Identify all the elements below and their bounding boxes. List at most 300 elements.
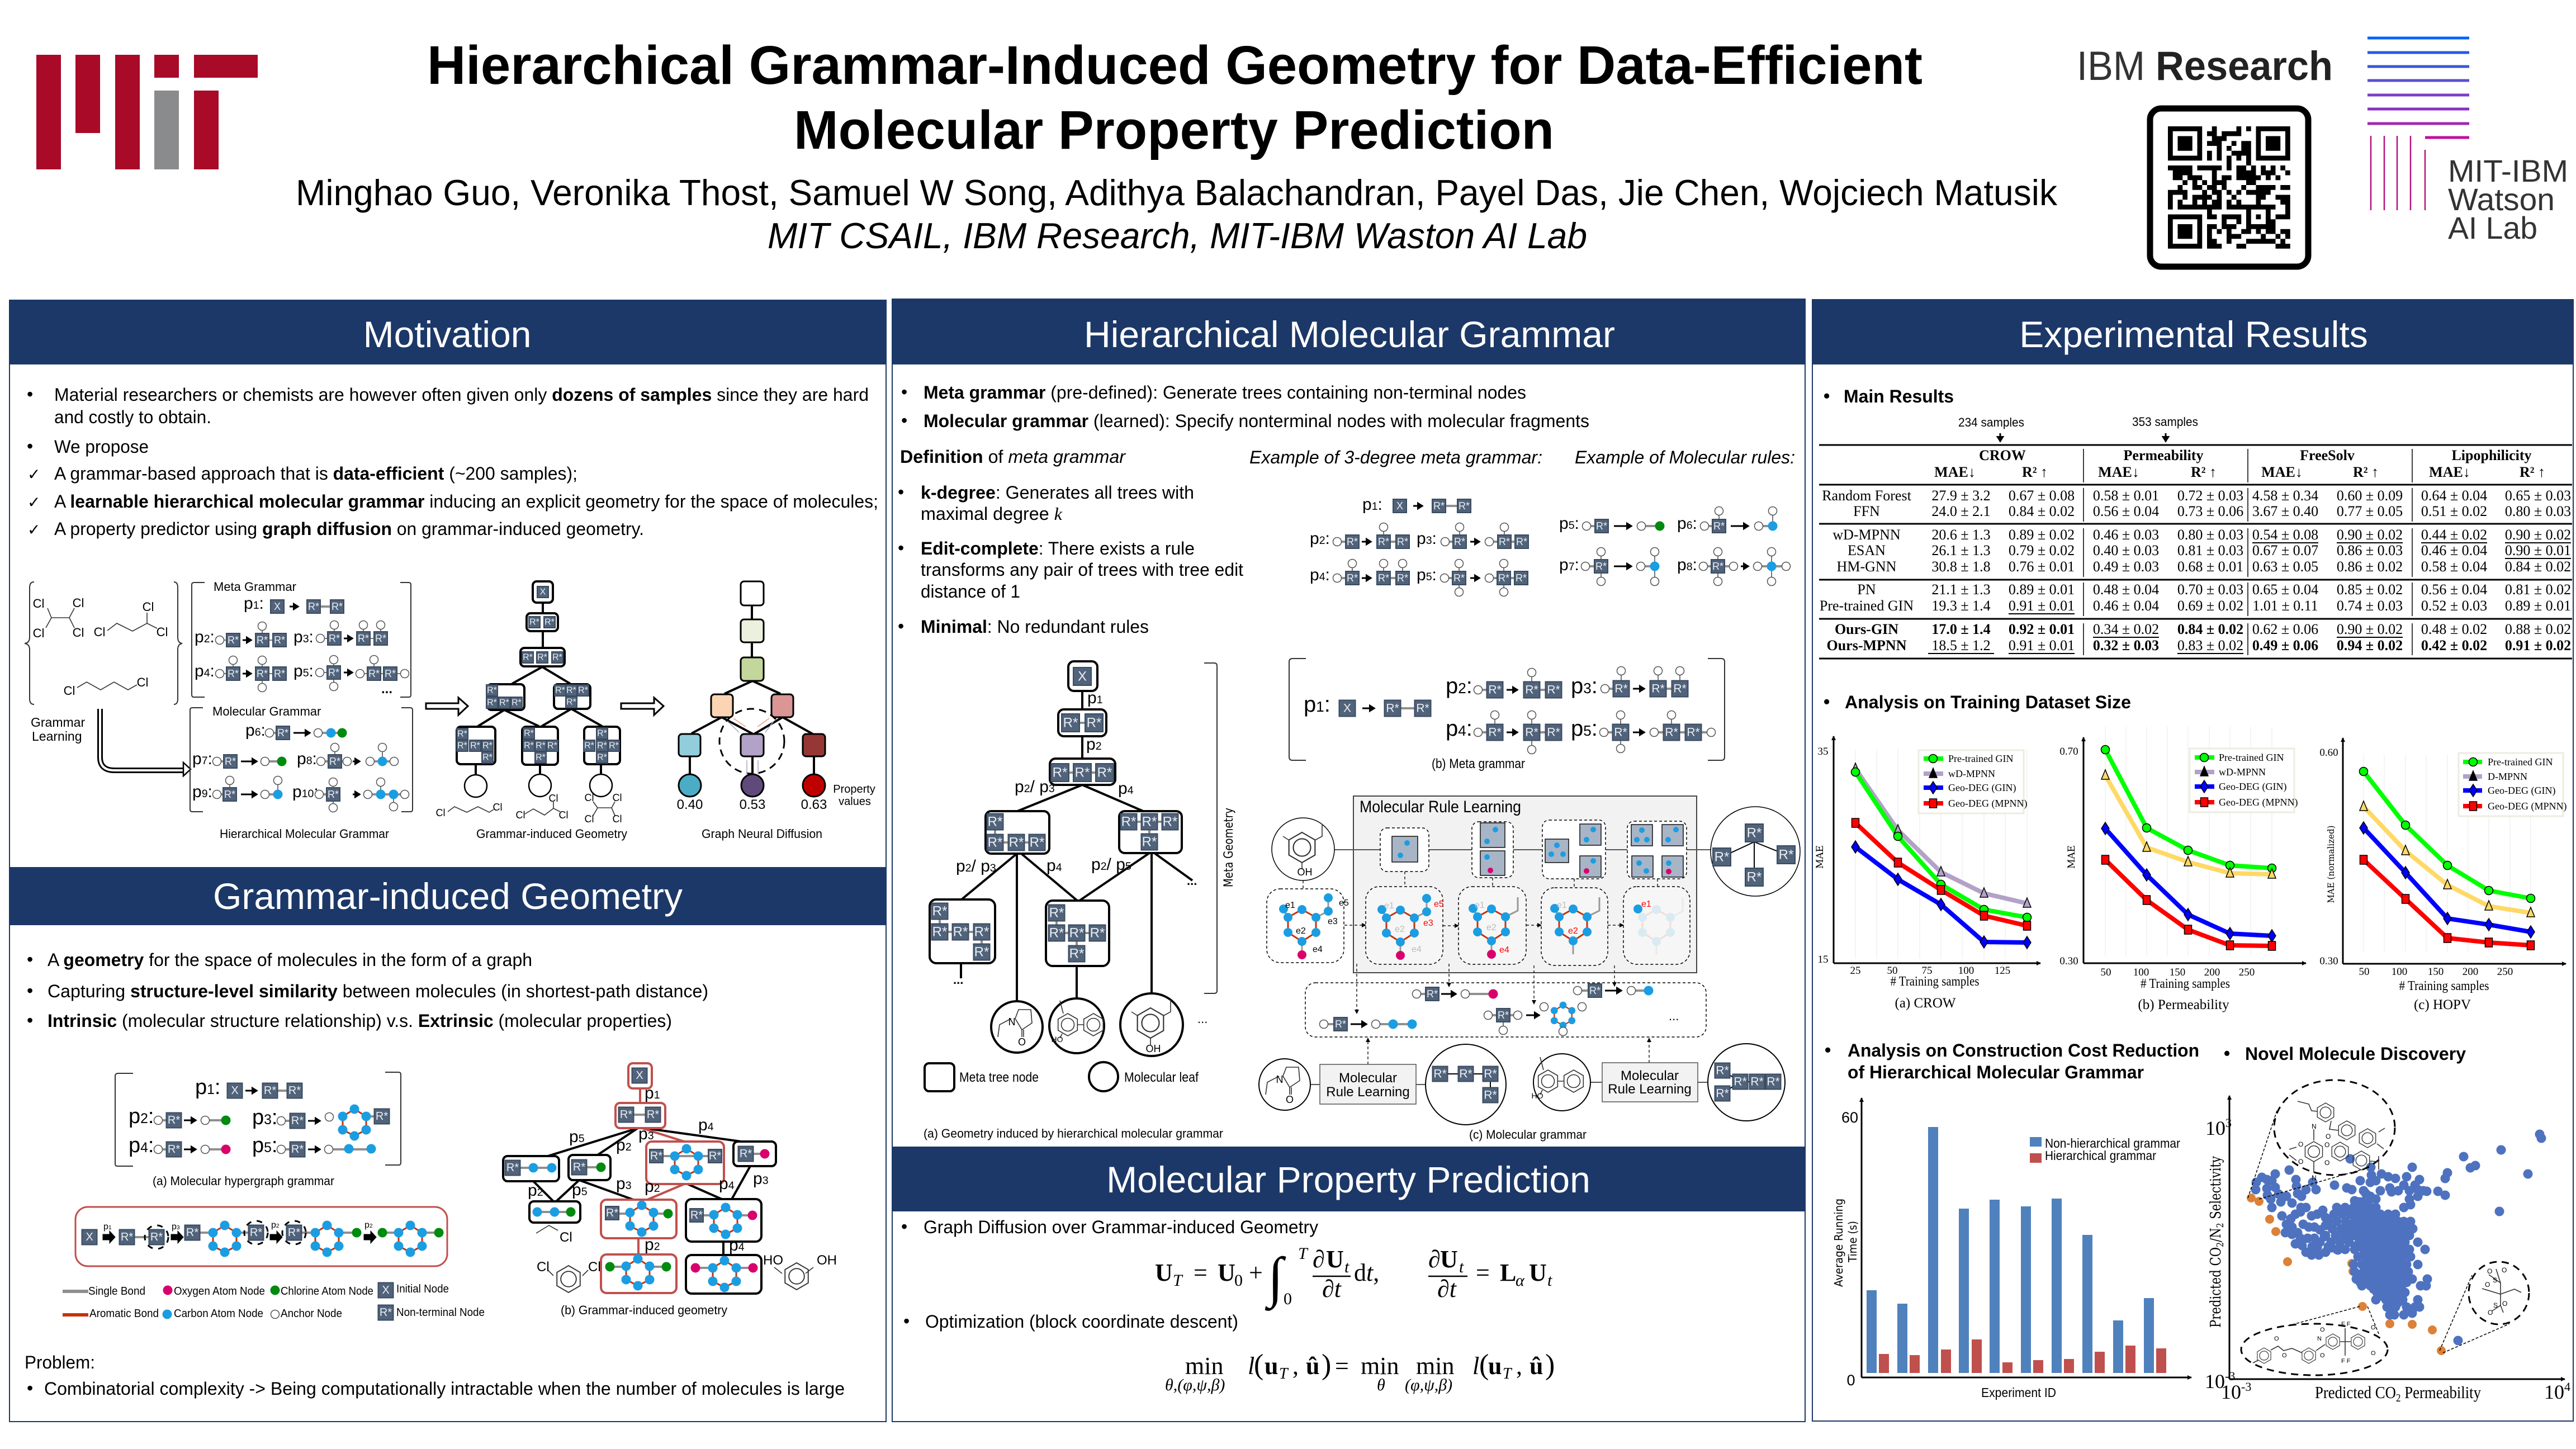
diagram: grammar-induced geometry tree: R*	[523, 653, 533, 662]
diagram: meta grammar rules: R*	[274, 668, 285, 679]
equation: graph diffusion: ∂t	[1437, 1275, 1457, 1303]
diagram: geometry induced by hierarchical molecular grammar: p2/ p3	[1015, 778, 1055, 796]
table: main results: PN	[1857, 581, 1876, 598]
equation: optimization: T	[1503, 1365, 1513, 1382]
table: main results: 0.89 ± 0.02	[2009, 527, 2075, 543]
table: main results: MAE↓	[2098, 464, 2139, 480]
diagram: molecular rule learning: e3	[1328, 917, 1338, 926]
diagram: input molecules: Cl	[73, 596, 84, 610]
diagram: molecular rule learning: e2	[1568, 926, 1578, 936]
equation: optimization: )	[1545, 1349, 1555, 1381]
diagram: meta grammar rules: p2:	[195, 628, 215, 646]
diagram: grammar-induced geometry tree: R*	[487, 685, 497, 695]
diagram: grammar-induced geometry graph: R*	[606, 1207, 618, 1219]
table: main results: 0.91 ± 0.02	[2505, 637, 2571, 654]
table: main results: 0.80 ± 0.03	[2505, 503, 2571, 519]
line chart: CROW: Geo-DEG (MPNN)	[1948, 798, 2027, 809]
table: main results: 0.90 ± 0.02	[2505, 527, 2571, 543]
diagram: grammar-induced geometry graph: p5	[572, 1181, 588, 1199]
callout: molecule 1: O	[2324, 1141, 2329, 1149]
heading: main results: Main Results	[1844, 386, 1954, 406]
title: Molecular Property Prediction	[794, 100, 1554, 160]
heading: Hierarchical Molecular Grammar: Hierarchical Molecular Grammar	[1084, 314, 1615, 355]
diagram: grammar-induced geometry tree: Cl	[493, 802, 502, 813]
diagram: rule learning examples: HO	[1532, 1091, 1543, 1100]
diagram: geometry induced by hierarchical molecular grammar: R*	[1163, 814, 1177, 830]
callout: molecule 2	[2241, 1321, 2388, 1375]
heading: Experimental Results	[1812, 300, 2573, 364]
diagram: geometry induced by hierarchical molecular grammar: R*	[1097, 765, 1112, 780]
table: main results: 0.42 ± 0.02	[2421, 637, 2487, 654]
callout: molecule 1: O	[2298, 1158, 2303, 1166]
diagram: derivation sequence	[75, 1207, 447, 1266]
text block: motivation bullets: ✓	[27, 493, 40, 512]
scatter plot: novel molecules: /N	[2208, 1228, 2224, 1242]
diagram: molecular grammar rules: R*	[277, 727, 288, 738]
diagram: graph neural diffusion: 0.53	[740, 797, 765, 812]
diagram: molecular hypergraph grammar: R*	[168, 1114, 180, 1126]
scatter plot: novel molecules: -3	[2225, 1369, 2235, 1383]
line chart: HOPV: (c) HOPV	[2414, 997, 2471, 1012]
diagram: molecular rule learning: Molecular Rule Learning	[1360, 798, 1521, 816]
panel: Hierarchical Molecular Grammar	[892, 299, 1805, 1422]
table: main results: 0.86 ± 0.03	[2337, 542, 2403, 558]
diagram: grammar-induced geometry tree: Cl	[613, 813, 622, 825]
callout: molecule 2: N	[2317, 1336, 2322, 1342]
diagram: grammar-induced geometry graph: X	[636, 1069, 643, 1082]
text block: problem: •	[27, 1378, 33, 1398]
text: example labels	[1249, 447, 1795, 467]
diagram: input molecules: Cl	[64, 684, 75, 698]
diagram: grammar-induced geometry tree: R*	[457, 741, 467, 750]
callout: molecule 3: O	[2502, 1266, 2507, 1274]
heading: Molecular Property Prediction: Molecular Property Prediction	[1106, 1159, 1590, 1200]
table: main results: MAE↓	[2261, 464, 2303, 480]
line chart: CROW: wD-MPNN	[1948, 768, 1995, 779]
table: main results: 0.92 ± 0.01	[2009, 621, 2075, 637]
diagram: molecular rule learning: e2	[1296, 926, 1306, 936]
scatter plot: novel molecules: 2	[2215, 1223, 2226, 1228]
line chart: HOPV: MAE (normalized)	[2326, 825, 2336, 903]
equation: graph diffusion: U	[1326, 1246, 1344, 1273]
table: main results: 17.0 ± 1.4	[1931, 621, 1991, 637]
diagram: derivation sequence: p2	[364, 1220, 373, 1230]
diagram: input molecules: Cl	[33, 626, 44, 640]
diagram: meta grammar rules: R*	[332, 601, 343, 612]
equation: optimization: ,	[1516, 1352, 1522, 1380]
equation: optimization: û	[1306, 1352, 1319, 1380]
table: main results: 0.85 ± 0.02	[2337, 581, 2403, 598]
diagram: derivation sequence: R*	[150, 1231, 163, 1243]
diagram: molecular rule learning: e1	[1384, 901, 1394, 911]
logo: MIT-IBM Watson AI Lab	[2367, 38, 2568, 245]
logo: MIT-IBM Watson AI Lab: Watson	[2448, 182, 2555, 217]
equation: graph diffusion: dt,	[1354, 1259, 1379, 1286]
bar chart: running time: 0	[1846, 1372, 1855, 1389]
diagram: meta grammar: p5:	[1571, 716, 1598, 741]
QR code	[2150, 108, 2308, 267]
table: main results: 0.91 ± 0.01	[2009, 637, 2075, 654]
diagram: grammar-induced geometry tree: X	[540, 587, 546, 597]
equation: graph diffusion: =	[1194, 1259, 1208, 1286]
equation: optimization: =	[1335, 1352, 1349, 1380]
callout: molecule 3: S	[2493, 1301, 2498, 1309]
diagram: molecular rules example	[1559, 506, 1790, 586]
diagram: molecular rule learning: R*	[1779, 847, 1793, 862]
diagram: meta grammar: p3:	[1571, 674, 1598, 698]
diagram: molecular rules example: p5:	[1559, 514, 1579, 533]
line chart: Permeability: 250	[2239, 967, 2255, 978]
callout: molecule 1: O	[2324, 1159, 2329, 1167]
line chart: Permeability: wD-MPNN	[2219, 766, 2266, 778]
diagram: grammar-induced geometry graph: p4	[719, 1175, 735, 1193]
panel: Experimental Results	[1812, 300, 2573, 1421]
diagram: geometry induced by hierarchical molecular grammar: R*	[1075, 765, 1090, 780]
diagram: grammar-induced geometry tree: R*	[609, 741, 619, 750]
table: main results: 21.1 ± 1.3	[1931, 581, 1991, 598]
logo: IBM Research: Research	[2156, 44, 2333, 89]
diagram: grammar-induced geometry tree: Cl	[549, 793, 558, 804]
diagram: meta grammar rules: R*	[328, 667, 339, 678]
equation: graph diffusion: =	[1476, 1259, 1490, 1286]
diagram: meta grammar: R*	[1547, 726, 1560, 739]
diagram: grammar-induced geometry graph: R*	[690, 1209, 703, 1221]
diagram: input molecules: Cl	[33, 596, 44, 610]
diagram: rule learning examples	[1259, 1044, 1785, 1125]
diagram: geometry induced by hierarchical molecular grammar: O	[1018, 1036, 1026, 1048]
line chart: HOPV: # Training samples	[2399, 979, 2489, 993]
table: main results: 18.5 ± 1.2	[1931, 637, 1991, 654]
table: main results: 0.58 ± 0.04	[2421, 558, 2487, 575]
table: main results: 0.81 ± 0.03	[2177, 542, 2243, 558]
equation: graph diffusion: U	[1529, 1259, 1547, 1286]
line chart: Permeability: Pre-trained GIN	[2219, 752, 2284, 763]
equation: optimization: min	[1185, 1352, 1223, 1380]
bar chart: running time: Non-hierarchical grammar	[2045, 1136, 2180, 1150]
diagram: molecular rule learning: e4	[1412, 945, 1422, 954]
diagram: molecular hypergraph grammar: R*	[264, 1085, 276, 1097]
diagram: rule learning examples: R*	[1750, 1076, 1764, 1088]
equation: graph diffusion: ∫	[1265, 1246, 1286, 1311]
callout: molecule 2: F F	[2341, 1358, 2351, 1365]
diagram: geometry induced by hierarchical molecular grammar: R*	[1009, 835, 1024, 850]
line chart: Permeability: 50	[2101, 967, 2111, 978]
diagram: molecular hypergraph grammar: R*	[291, 1115, 304, 1127]
table: main results: 0.89 ± 0.01	[2009, 581, 2075, 598]
diagram: geometry induced by hierarchical molecular grammar: R*	[1142, 834, 1157, 850]
diagram: grammar-induced geometry tree	[436, 581, 622, 825]
table: main results: 1.01 ± 0.11	[2252, 598, 2318, 614]
equation: optimization: l	[1472, 1352, 1479, 1380]
line chart: HOPV: 100	[2392, 966, 2407, 978]
caption: molecular grammar: (c) Molecular grammar	[1469, 1128, 1587, 1142]
table: main results: R² ↑	[2520, 464, 2545, 480]
table: main results: 234 samples	[1958, 415, 2024, 429]
diagram: molecular rule learning: R*	[1747, 870, 1761, 884]
diagram: meta grammar rules: ...	[381, 681, 392, 697]
diagram: molecular rules example: R*	[1712, 561, 1723, 572]
text block: problem: Combinatorial complexity -> Being computationally intractable when the number of molecules is large	[44, 1379, 845, 1399]
table: main results: 0.91 ± 0.01	[2009, 598, 2075, 614]
diagram: geometry induced by hierarchical molecular grammar: R*	[1090, 926, 1105, 940]
diagram: molecular hypergraph grammar: R*	[291, 1143, 304, 1156]
title: Hierarchical Grammar-Induced Geometry for Data-Efficient	[427, 35, 1922, 96]
diagram: meta grammar rules: p4:	[195, 662, 215, 680]
table: main results: 0.48 ± 0.02	[2421, 621, 2487, 637]
text block: definition of meta grammar: k-degree: Generates all trees with	[921, 482, 1194, 503]
diagram: 3-degree meta grammar example: p2:	[1310, 529, 1330, 548]
table: main results: 0.34 ± 0.02	[2093, 621, 2159, 637]
text block: motivation bullets: ✓	[27, 520, 40, 539]
diagram: meta grammar: R*	[1651, 682, 1665, 695]
diagram: 3-degree meta grammar example: X	[1396, 500, 1403, 512]
text block: definition of meta grammar: Minimal: No redundant rules	[921, 617, 1149, 637]
table: main results: 4.58 ± 0.34	[2252, 487, 2318, 504]
equation: optimization: û	[1530, 1352, 1543, 1380]
logo: MIT-IBM Watson AI Lab: MIT-IBM	[2448, 153, 2568, 188]
scatter plot: novel molecules: 2	[2215, 1242, 2226, 1247]
table: main results	[1819, 415, 2572, 659]
diagram: grammar-induced geometry tree: R*	[597, 752, 607, 763]
diagram: grammar-induced geometry graph: R*	[650, 1150, 662, 1162]
heading: construction cost reduction: •	[1825, 1040, 1831, 1060]
diagram: grammar-induced geometry graph: Cl	[560, 1230, 572, 1245]
equation: graph diffusion: t	[1344, 1258, 1349, 1276]
diagram: geometry induced by hierarchical molecular grammar: R*	[932, 903, 947, 919]
arrow: to diffusion	[621, 698, 664, 715]
diagram: grammar-induced geometry tree: Cl	[436, 807, 445, 818]
diagram: meta grammar rules: R*	[329, 633, 340, 644]
table: main results: 0.67 ± 0.08	[2009, 487, 2075, 504]
diagram: meta grammar: R*	[1488, 726, 1502, 739]
diagram: grammar-induced geometry graph: R*	[573, 1161, 585, 1173]
line chart: Permeability: Geo-DEG (GIN)	[2219, 781, 2286, 793]
table: main results: 0.46 ± 0.03	[2093, 527, 2159, 543]
table: main results: 0.76 ± 0.01	[2009, 558, 2075, 575]
diagram: graph neural diffusion: values	[839, 795, 871, 808]
table: main results: 30.8 ± 1.8	[1931, 558, 1991, 575]
diagram: rule learning examples: R*	[1716, 1064, 1729, 1077]
callout: molecule 1: N	[2312, 1174, 2317, 1182]
label: meta geometry bracket	[1204, 663, 1236, 993]
text block: motivation bullets: We propose	[54, 437, 149, 457]
text block: geometry bullets: A geometry for the space of molecules in the form of a graph	[48, 950, 532, 970]
caption: hierarchical molecular grammar: Hierarchical Molecular Grammar	[220, 827, 389, 841]
text block: geometry bullets: Intrinsic (molecular structure relationship) v.s. Extrinsic (molecular properties)	[48, 1011, 672, 1031]
diagram: molecular grammar rules: Molecular Grammar	[212, 704, 321, 718]
diagram: geometry induced by hierarchical molecular grammar: R*	[974, 945, 989, 959]
equation: graph diffusion: U	[1218, 1259, 1235, 1286]
diagram: meta grammar: R*	[1386, 702, 1399, 714]
table: main results: MAE↓	[2429, 464, 2470, 480]
diagram: derivation sequence: p2	[271, 1220, 280, 1230]
diagram: grammar-induced geometry tree: R*	[584, 741, 594, 750]
bar chart: running time: Time (s)	[1846, 1221, 1859, 1263]
callout: molecule 2: O	[2371, 1324, 2376, 1331]
line chart: CROW: 50	[1887, 965, 1897, 977]
scatter plot: novel molecules: Selectivity	[2208, 1156, 2224, 1223]
diagram: grammar-induced geometry graph: (b) Grammar-induced geometry	[561, 1303, 727, 1317]
diagram: grammar-induced geometry tree: R*	[537, 653, 547, 662]
line chart: Permeability: 0.70	[2059, 746, 2078, 757]
diagram: geometry induced by hierarchical molecular grammar: R*	[1049, 926, 1064, 940]
heading: Molecular Property Prediction	[892, 1147, 1805, 1211]
diagram: rule learning examples: Rule Learning	[1326, 1085, 1410, 1100]
diagram: molecular rules example: p7:	[1559, 556, 1579, 574]
callout: molecule 2: O	[2274, 1336, 2279, 1342]
equation: graph diffusion: t	[1459, 1258, 1464, 1276]
table: main results: MAE↓	[1934, 464, 1976, 480]
diagram: grammar-induced geometry graph: p3	[616, 1175, 632, 1193]
line chart: Permeability: MAE	[2066, 845, 2077, 869]
line chart: Permeability: 150	[2170, 967, 2185, 978]
text block: definition of meta grammar	[898, 447, 1243, 637]
legend: node and bond types: Oxygen Atom Node	[174, 1285, 265, 1298]
line chart: HOPV: D-MPNN	[2488, 771, 2527, 782]
diagram: learned molecular rules: R*	[1498, 1010, 1509, 1021]
text block: graph diffusion: •	[901, 1216, 907, 1237]
diagram: geometry induced by hierarchical molecular grammar: p1	[1087, 689, 1103, 707]
diagram: grammar-induced geometry tree: R*	[457, 729, 467, 739]
table: main results: 0.72 ± 0.03	[2177, 487, 2243, 504]
heading: Hierarchical Molecular Grammar	[892, 299, 1805, 364]
diagram: grammar-induced geometry tree: R*	[482, 741, 493, 750]
line chart: Permeability: Geo-DEG (MPNN)	[2219, 797, 2298, 808]
caption: geometry induced: (a) Geometry induced by hierarchical molecular grammar	[924, 1126, 1223, 1140]
scatter plot: novel molecules: Predicted CO	[2208, 1229, 2224, 1328]
heading: Motivation: Motivation	[363, 314, 531, 355]
text block: grammar types: Meta grammar (pre-defined): Generate trees containing non-terminal nodes	[924, 382, 1526, 402]
line chart: CROW: Geo-DEG (GIN)	[1948, 782, 2016, 794]
table: main results: 0.90 ± 0.02	[2337, 527, 2403, 543]
equation: graph diffusion: ∂	[1313, 1246, 1325, 1273]
diagram: grammar-induced geometry graph: p4	[698, 1116, 714, 1134]
diagram: molecular hypergraph grammar: p1:	[195, 1076, 220, 1099]
diagram: rule learning examples: O	[1286, 1094, 1294, 1105]
diagram: geometry induced by hierarchical molecular grammar: X	[1078, 669, 1087, 684]
line chart: CROW: Pre-trained GIN	[1948, 753, 2013, 764]
diagram: meta grammar rules: R*	[228, 634, 239, 646]
diagram: meta grammar: R*	[1614, 682, 1628, 695]
diagram: grammar-induced geometry graph: p4	[729, 1236, 745, 1254]
text block: motivation bullets: Material researchers or chemists are however often given only dozens of samples since they are hard	[54, 385, 869, 405]
equation: optimization: u	[1265, 1352, 1278, 1380]
bar chart: running time: 60	[1841, 1109, 1858, 1126]
table: main results: 0.67 ± 0.07	[2252, 542, 2318, 558]
table: main results: 0.56 ± 0.04	[2093, 503, 2159, 519]
text block: motivation bullets: •	[27, 384, 33, 404]
diagram: molecular rule learning: e5	[1434, 899, 1444, 909]
text block: optimization: •	[903, 1311, 910, 1331]
diagram: geometry induced by hierarchical molecular grammar: p2	[1086, 735, 1102, 754]
diagram: grammar-induced geometry tree: Cl	[585, 792, 594, 803]
table: main results: 0.62 ± 0.06	[2252, 621, 2318, 637]
table: main results: Ours-MPNN	[1827, 637, 1907, 654]
diagram: meta grammar: R*	[1525, 683, 1538, 697]
legend: meta tree node and molecular leaf: Molecular leaf	[1124, 1070, 1199, 1085]
text block: geometry bullets: •	[27, 949, 33, 969]
equation: graph diffusion: L	[1500, 1259, 1516, 1286]
line chart: Permeability	[2059, 727, 2306, 1012]
diagram: meta grammar rules: R*	[257, 634, 268, 646]
table: main results: 0.70 ± 0.03	[2177, 581, 2243, 598]
diagram: grammar-induced geometry tree: Cl	[585, 813, 594, 825]
table: main results: 0.46 ± 0.04	[2093, 598, 2159, 614]
affiliations: MIT CSAIL, IBM Research, MIT-IBM Waston AI Lab	[768, 215, 1587, 256]
diagram: grammar-induced geometry graph: p2	[645, 1177, 660, 1196]
line chart: CROW	[1815, 736, 2040, 1011]
diagram: molecular rule learning: e1	[1557, 901, 1567, 910]
diagram: molecular hypergraph grammar: p4:	[129, 1134, 154, 1157]
equation: graph diffusion: T	[1298, 1244, 1309, 1263]
diagram: input molecules: Cl	[137, 675, 148, 689]
diagram: grammar-induced geometry tree: R*	[487, 698, 497, 708]
equation: graph diffusion: U	[1155, 1259, 1173, 1286]
text block: definition of meta grammar: •	[898, 482, 904, 502]
equation: optimization: ,	[1292, 1352, 1299, 1380]
diagram: meta grammar rules: R*	[375, 633, 386, 644]
table: main results: 24.0 ± 2.1	[1931, 503, 1991, 519]
diagram: grammar-induced geometry tree: R*	[524, 729, 534, 738]
table: main results: 353 samples	[2132, 415, 2198, 429]
scatter plot: novel molecules	[2205, 1080, 2570, 1404]
diagram: grammar-induced geometry tree: R*	[529, 617, 539, 627]
diagram: meta grammar rules: p1:	[244, 594, 264, 613]
legend: node and bond types: Anchor Node	[281, 1308, 342, 1320]
table: main results: 0.65 ± 0.03	[2505, 487, 2571, 504]
diagram: 3-degree meta grammar example: p3:	[1417, 529, 1437, 548]
legend: node and bond types: R*	[380, 1306, 392, 1319]
scatter plot: novel molecules: -3	[2241, 1380, 2251, 1394]
diagram: meta grammar: R*	[1665, 726, 1678, 739]
table: main results: 0.63 ± 0.05	[2252, 558, 2318, 575]
diagram: molecular rules example: R*	[1595, 561, 1607, 572]
table: main results: 0.79 ± 0.02	[2009, 542, 2075, 558]
table: main results: R² ↑	[2191, 464, 2217, 480]
diagram: molecular rules example: p8:	[1677, 556, 1697, 574]
diagram: molecular rule learning: e4	[1499, 945, 1509, 955]
table: main results: 0.84 ± 0.02	[2177, 621, 2243, 637]
equation: optimization: T	[1279, 1365, 1289, 1382]
diagram: 3-degree meta grammar example: R*	[1347, 572, 1358, 584]
equation: graph diffusion: ∂	[1428, 1246, 1441, 1273]
line chart: HOPV	[2319, 738, 2566, 1012]
diagram: molecular rule learning: e3	[1423, 918, 1433, 928]
line chart: HOPV: Geo-DEG (GIN)	[2488, 785, 2555, 797]
diagram: input molecules: Cl	[143, 600, 154, 614]
table: main results: 0.68 ± 0.01	[2177, 558, 2243, 575]
diagram: grammar-induced geometry graph: OH	[817, 1253, 837, 1268]
diagram: grammar-induced geometry graph: p5	[569, 1128, 585, 1146]
diagram: molecular grammar rules: p9:	[192, 783, 212, 801]
diagram: rule learning examples: R*	[1459, 1068, 1472, 1080]
heading: Experimental Results: Experimental Results	[2019, 314, 2368, 355]
diagram: 3-degree meta grammar example: R*	[1433, 500, 1445, 512]
legend: meta tree node and molecular leaf	[925, 1062, 1199, 1091]
scatter plot: novel molecules: Permeability	[2401, 1382, 2481, 1402]
diagram: molecular rule learning: R*	[1715, 850, 1729, 864]
line chart: CROW: (a) CROW	[1895, 996, 1956, 1011]
diagram: derivation sequence: R*	[250, 1227, 262, 1239]
text block: geometry bullets	[27, 949, 708, 1031]
diagram: grammar-induced geometry graph: p1	[645, 1084, 660, 1102]
diagram: meta grammar rules: R*	[385, 668, 396, 679]
diagram: meta grammar: R*	[1525, 726, 1538, 739]
text block: motivation bullets: ✓	[27, 465, 40, 484]
text block: motivation bullets: •	[27, 436, 33, 456]
diagram: graph neural diffusion: Property	[833, 783, 875, 795]
equation: optimization: min	[1416, 1352, 1454, 1380]
